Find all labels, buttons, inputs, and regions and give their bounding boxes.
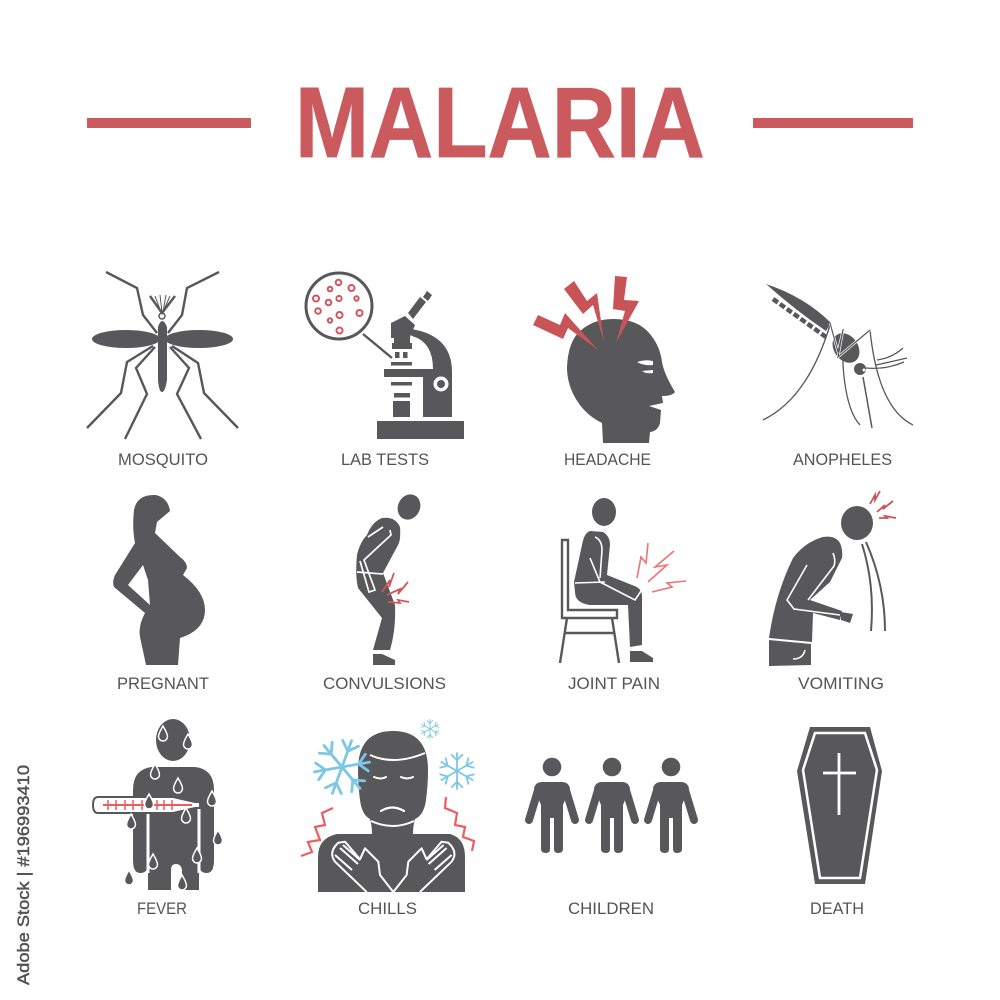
panel: anopheles bbox=[763, 284, 913, 469]
icon: pregnant woman bbox=[113, 495, 205, 665]
panel: vomiting bbox=[769, 491, 896, 693]
icon: three children bbox=[529, 758, 694, 853]
label: joint pain: JOINT PAIN bbox=[568, 674, 660, 693]
label: fever: FEVER bbox=[137, 899, 187, 918]
stock id side text: Adobe Stock | #196993410 bbox=[14, 765, 33, 985]
label: pregnant: PREGNANT bbox=[117, 674, 209, 693]
label: anopheles: ANOPHELES bbox=[793, 450, 892, 469]
panel: death bbox=[797, 727, 882, 918]
panel: mosquito bbox=[87, 272, 238, 469]
label: children: CHILDREN bbox=[568, 899, 654, 918]
label: vomiting: VOMITING bbox=[798, 674, 884, 693]
icon: sweating man with thermometer bbox=[93, 719, 222, 890]
icon: microscope bbox=[306, 273, 464, 439]
magnified sample circle bbox=[306, 273, 392, 358]
label: headache: HEADACHE bbox=[564, 450, 651, 469]
title bbox=[87, 67, 913, 179]
icon: bent man with pain bbox=[356, 491, 424, 665]
panel: lab tests bbox=[306, 273, 464, 469]
snowflakes bbox=[306, 720, 475, 803]
icon: anopheles mosquito bbox=[763, 284, 913, 428]
label: convulsions: CONVULSIONS bbox=[323, 674, 446, 693]
label: death: DEATH bbox=[810, 899, 864, 918]
panel: joint pain bbox=[560, 498, 686, 693]
panel: fever bbox=[93, 719, 222, 918]
panel: children bbox=[529, 758, 694, 918]
panel: chills bbox=[301, 720, 475, 918]
panel: convulsions bbox=[323, 491, 446, 693]
icon: vomiting man bbox=[769, 491, 896, 666]
label: chills: CHILLS bbox=[358, 899, 417, 918]
panel: headache bbox=[533, 276, 675, 469]
icon: shivering man bbox=[301, 720, 475, 892]
icon: mosquito bbox=[87, 272, 238, 439]
icon: head with bolts bbox=[533, 276, 675, 443]
panel: pregnant bbox=[113, 495, 209, 693]
icon: coffin with cross bbox=[797, 727, 882, 884]
label: lab tests: LAB TESTS bbox=[341, 450, 429, 469]
label: mosquito: MOSQUITO bbox=[118, 450, 208, 469]
title: MALARIA bbox=[295, 67, 705, 179]
icon: seated man bbox=[560, 498, 686, 663]
